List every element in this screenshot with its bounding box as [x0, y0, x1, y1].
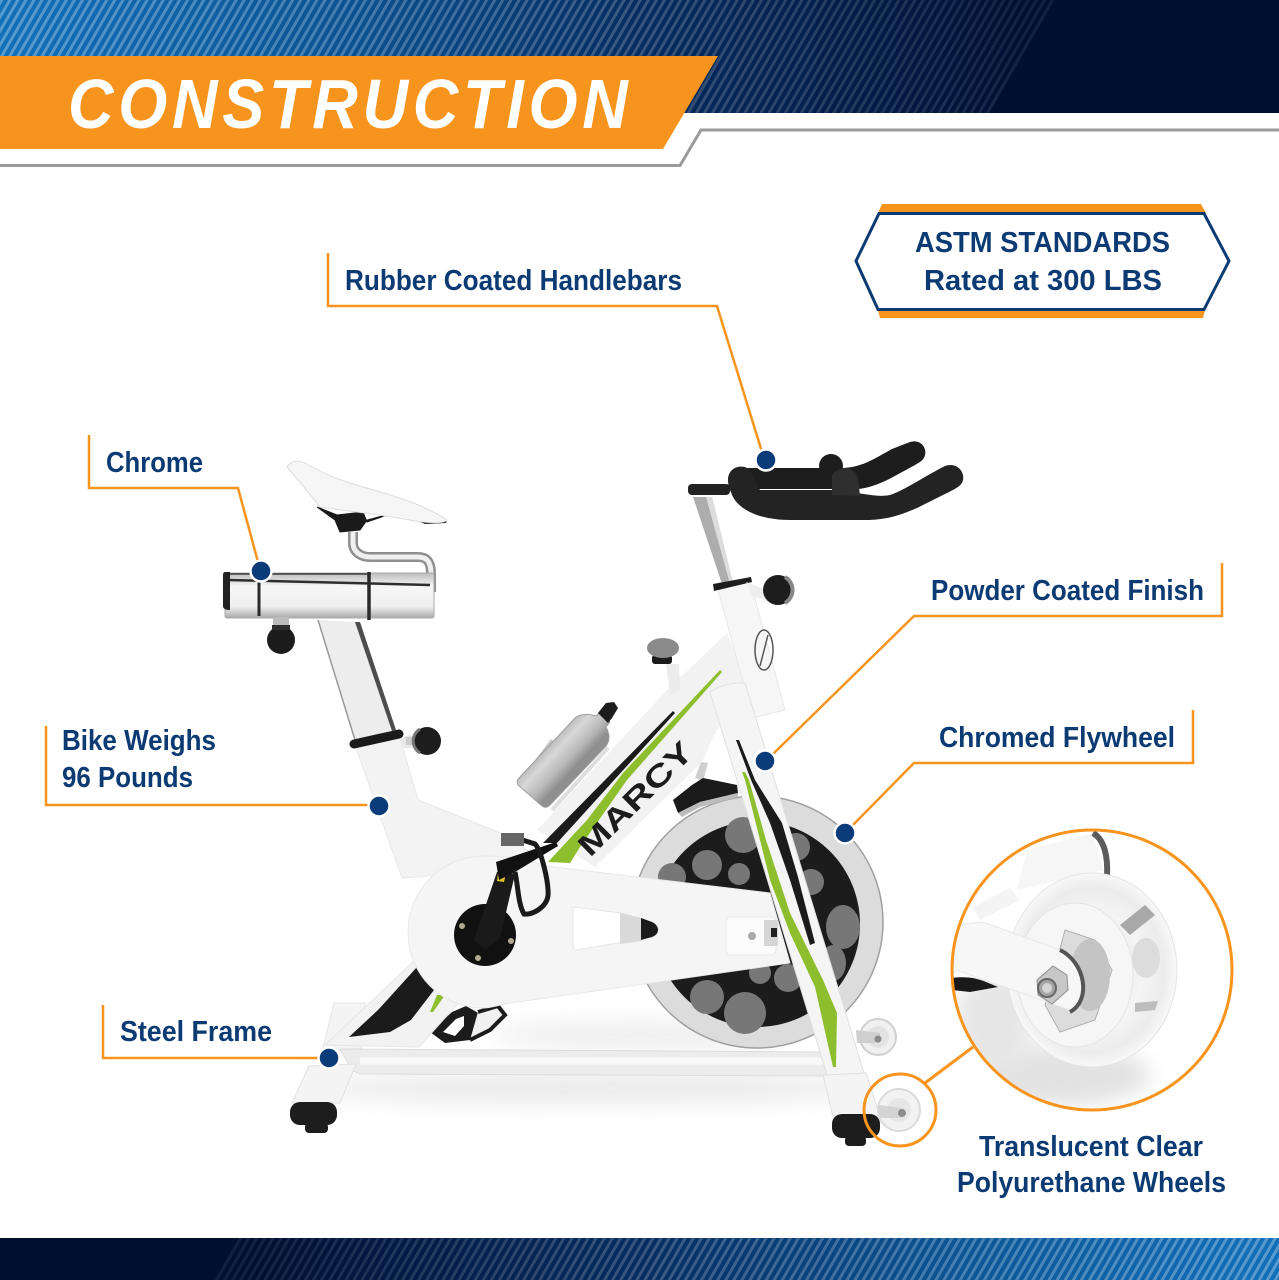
chrome seat slider [223, 572, 434, 620]
brake housing [673, 762, 738, 817]
guard bracket [726, 917, 778, 955]
enlarged wheel [954, 832, 1178, 1108]
title: CONSTRUCTION [68, 66, 630, 144]
guard window [573, 907, 658, 950]
handlebar stem [688, 484, 752, 591]
front transport wheel [878, 1089, 920, 1131]
water bottle [517, 702, 618, 810]
callout: rubber coated handlebars [328, 253, 776, 470]
callout: chromed flywheel [834, 710, 1193, 844]
front leg [710, 683, 864, 1075]
lower frame tube [325, 960, 470, 1047]
upper pedal [496, 833, 558, 914]
crank [454, 872, 516, 966]
frame stripes [543, 670, 722, 863]
seat tube [356, 735, 540, 878]
handlebars [728, 441, 963, 520]
adjustment knob: seat post [406, 727, 441, 755]
top tube [537, 580, 785, 867]
base [292, 1003, 880, 1117]
footer band [0, 1238, 1279, 1280]
connector line [925, 1047, 973, 1083]
callout: wheel close-up [864, 828, 1234, 1146]
header outline stroke [0, 130, 1279, 166]
logo: MARCY [572, 735, 700, 863]
header band [0, 0, 1279, 113]
callout: powder coated finish [754, 563, 1222, 772]
callout: bike weight: Bike Weighs [62, 725, 216, 757]
callout: powder coated finish: Powder Coated Finish [931, 575, 1204, 607]
callout: bike weight [46, 725, 390, 816]
callout: chrome [89, 435, 272, 582]
callout: rubber coated handlebars: Rubber Coated Handlebars [345, 265, 682, 297]
callout: steel frame: Steel Frame [120, 1016, 272, 1048]
callout: chromed flywheel: Chromed Flywheel [939, 722, 1175, 754]
badge: ASTM standards: Rated at 300 LBS [924, 265, 1162, 297]
small wheel ring [864, 1074, 936, 1146]
callout: steel frame [103, 1005, 340, 1068]
seat slider post [318, 620, 399, 744]
adjustment knob: seat slider [267, 617, 295, 654]
badge: ASTM standards [856, 204, 1229, 318]
callout: bike weight: 96 Pounds [62, 762, 193, 794]
chain guard [408, 856, 790, 1008]
caption: wheels: Translucent Clear [979, 1131, 1203, 1163]
floor shadow [310, 1025, 870, 1102]
seat knob on top tube [647, 638, 680, 695]
lower pedal [430, 1006, 505, 1043]
adjustment knob: handlebar [746, 575, 793, 605]
feet [290, 1102, 880, 1146]
flywheel [631, 796, 883, 1048]
saddle [287, 461, 447, 532]
callout: chrome: Chrome [106, 447, 203, 479]
big ring [952, 830, 1232, 1110]
seat rail [353, 532, 431, 592]
title banner [0, 56, 718, 149]
caption: wheels [957, 1131, 1226, 1199]
rear transport wheel [856, 1019, 896, 1055]
badge: ASTM standards: ASTM STANDARDS [915, 227, 1170, 259]
caption: wheels: Polyurethane Wheels [957, 1167, 1226, 1199]
bike illustration [223, 441, 963, 1146]
